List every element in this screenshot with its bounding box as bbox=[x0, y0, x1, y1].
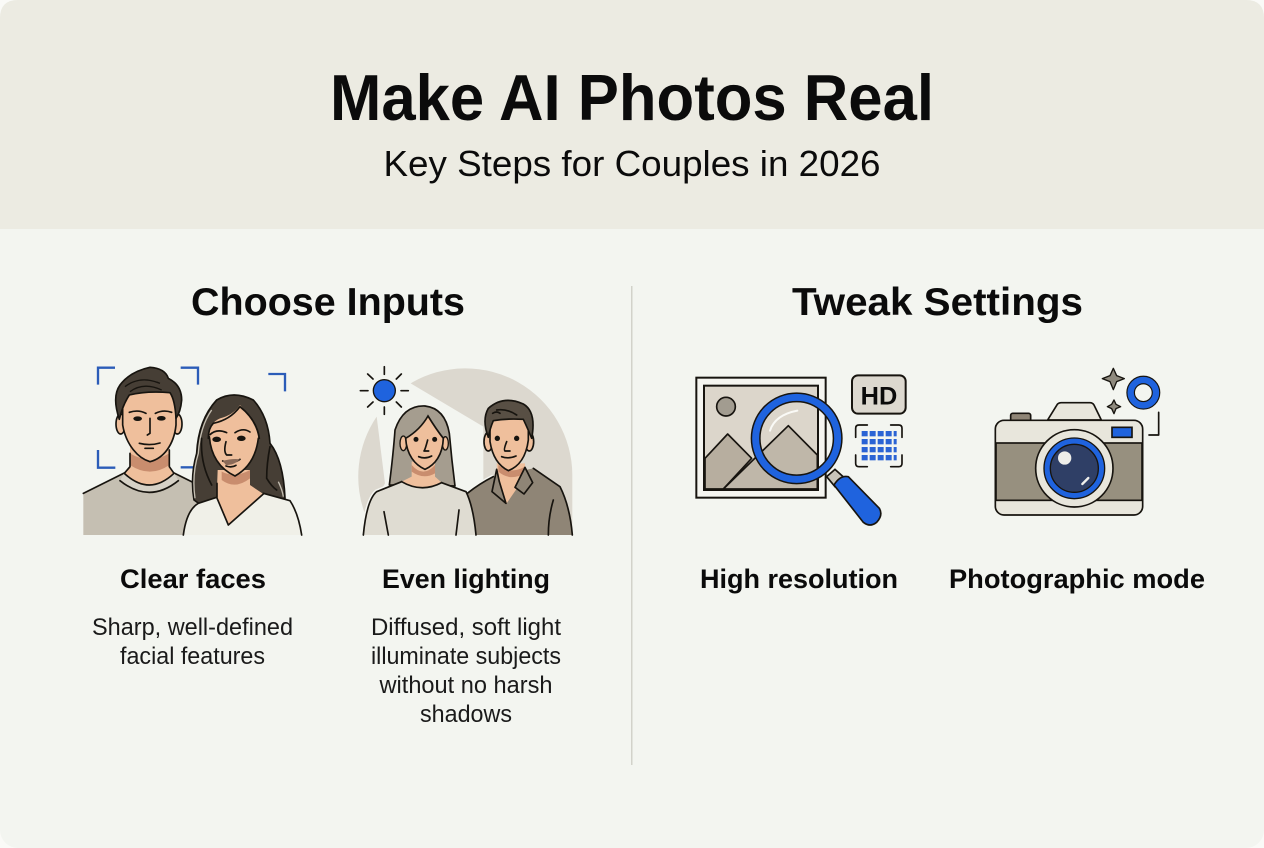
viewfinder hump bbox=[1048, 403, 1101, 420]
woman long hair bbox=[389, 406, 455, 486]
woman features bbox=[210, 430, 250, 467]
woman neck bbox=[217, 470, 263, 525]
woman hair front bbox=[201, 407, 277, 490]
man shirt bbox=[83, 473, 197, 535]
woman ears and face bbox=[400, 436, 407, 451]
man features bbox=[129, 411, 172, 448]
subtitle: Key Steps for Couples in 2026 bbox=[384, 143, 880, 184]
panel: tweak settings bbox=[696, 281, 1205, 594]
center divider bbox=[631, 286, 632, 765]
title: Make AI Photos Real bbox=[330, 61, 934, 134]
header band bbox=[0, 0, 1264, 229]
heading: choose inputs: Choose Inputs bbox=[191, 281, 465, 324]
moon bbox=[717, 397, 735, 416]
label: high resolution: High resolution bbox=[700, 564, 898, 594]
HD badge bbox=[852, 375, 906, 414]
woman shirt bbox=[363, 482, 476, 535]
man face bbox=[123, 388, 176, 462]
panel: choose inputs bbox=[83, 281, 572, 728]
woman neck bbox=[402, 462, 442, 488]
backdrop circle split by light beam bbox=[411, 368, 572, 535]
focus brackets bbox=[98, 368, 285, 468]
sun bbox=[360, 367, 408, 414]
woman face bbox=[209, 405, 258, 476]
heading: tweak settings: Tweak Settings bbox=[792, 281, 1083, 324]
man ears bbox=[116, 414, 125, 434]
camera body bbox=[995, 420, 1143, 515]
text: clear faces description bbox=[92, 614, 293, 670]
text: even lighting description: illuminate subjects bbox=[371, 643, 561, 670]
magnifier ring bbox=[756, 397, 838, 479]
label: photographic mode: Photographic mode bbox=[949, 564, 1205, 594]
text: clear faces description: Sharp, well-defined bbox=[92, 614, 293, 641]
lens bbox=[1036, 430, 1113, 507]
text: even lighting description bbox=[371, 614, 561, 728]
label: clear faces: Clear faces bbox=[120, 564, 266, 594]
flash window bbox=[1112, 427, 1132, 437]
blue ring bbox=[1131, 380, 1156, 405]
corner bracket bbox=[1149, 412, 1159, 435]
text: clear faces description: facial features bbox=[120, 643, 265, 670]
magnifier handle bbox=[827, 469, 845, 487]
man in collared shirt bbox=[467, 477, 493, 493]
man neck bbox=[124, 447, 174, 485]
man collar bbox=[120, 473, 178, 492]
text: even lighting description: shadows bbox=[420, 701, 512, 728]
shutter button bbox=[1011, 413, 1031, 423]
text: even lighting description: without no harsh bbox=[379, 672, 552, 699]
woman light halo bbox=[363, 406, 455, 535]
icon: clear faces couple bbox=[83, 367, 302, 535]
icon: even lighting couple bbox=[358, 367, 572, 535]
mountains bbox=[705, 434, 752, 489]
label: even lighting: Even lighting bbox=[382, 564, 550, 594]
pixel grid bbox=[862, 431, 897, 460]
text: even lighting description: Diffused, soft light bbox=[371, 614, 561, 641]
icon: high resolution magnifier bbox=[696, 375, 906, 525]
photo frame bbox=[696, 378, 826, 498]
woman hair back bbox=[192, 395, 285, 507]
sparkles bbox=[1102, 368, 1124, 390]
woman shirt bbox=[183, 493, 302, 535]
man hair bbox=[116, 367, 182, 419]
icon: high resolution magnifier: HD bbox=[861, 382, 897, 410]
icon: photographic mode camera bbox=[995, 368, 1159, 515]
